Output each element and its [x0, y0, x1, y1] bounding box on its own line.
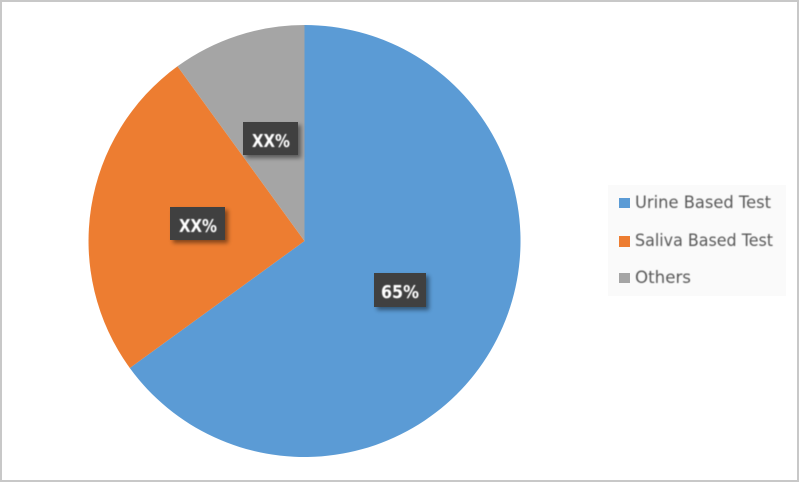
- pie chart: [89, 25, 521, 457]
- legend: [608, 185, 786, 296]
- legend item: urine based test: Urine Based Test: [635, 193, 772, 212]
- legend item: others: Others: [635, 268, 691, 287]
- slice: saliva based test: [89, 66, 304, 368]
- data label: saliva: XX%: [179, 216, 217, 237]
- data label: urine: 65%: [381, 282, 419, 303]
- data label: others: XX%: [252, 131, 290, 152]
- slice: others: [178, 25, 304, 241]
- data label: urine: [374, 273, 429, 310]
- slice: urine based test 65%: [130, 25, 521, 457]
- data label: others: [243, 122, 301, 158]
- data label: saliva: [170, 207, 228, 243]
- legend item: saliva based test: Saliva Based Test: [635, 231, 774, 250]
